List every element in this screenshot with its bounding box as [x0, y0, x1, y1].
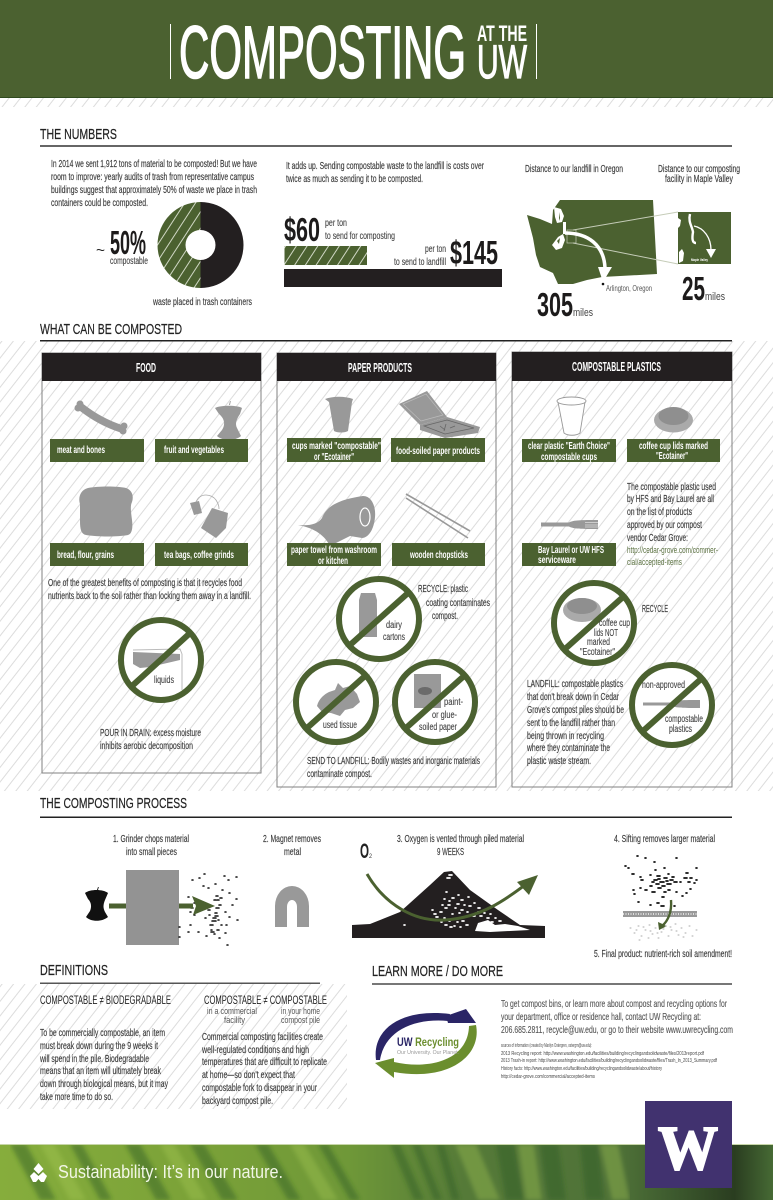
label: fruit and vegetables	[155, 439, 248, 462]
label: fruit and vegetables: fruit and vegetables	[164, 445, 224, 456]
text: landfill plastics: being thrown in recycling	[527, 731, 604, 742]
icon: pizza box	[399, 391, 480, 438]
definition: commercial vs home composting	[201, 993, 327, 1107]
stat: 50 percent compostable: compostable	[110, 256, 148, 267]
intro text: 2014 tons: In 2014 we sent 1,912 tons of material to be composted! But we have	[51, 159, 257, 170]
no sign: coffee cup lids not marked: marked	[587, 637, 610, 648]
section: definitions	[0, 963, 347, 1109]
definition: commercial vs home composting: facility	[224, 1015, 245, 1026]
label: food-soiled paper products	[391, 438, 485, 462]
no sign: coffee cup lids not marked	[554, 583, 634, 663]
label: paper towel: or kitchen	[318, 556, 348, 567]
icon: magnet	[275, 886, 309, 927]
UW logo: W	[658, 1115, 718, 1183]
no sign: coffee cup lids not marked: coffee cup	[599, 618, 630, 629]
intro text: cost: twice as much as sending it to be composted.	[286, 174, 423, 185]
text: sources: History facts: http://www.washington.edu/facilities/building/recyclingandsolidwaste/about/history	[501, 1066, 662, 1072]
text: sources: http://cedar-grove.com/commercial/accepted-items	[501, 1074, 595, 1080]
title	[179, 11, 527, 94]
UW logo	[645, 1101, 732, 1188]
text: approved plastics: cial/accepted-items	[627, 557, 682, 567]
step 2 caption	[263, 834, 321, 858]
label: meat and bones	[50, 439, 144, 462]
intro text: cost	[286, 161, 484, 185]
text: pour in drain	[100, 728, 201, 752]
label: cups marked compostable	[287, 438, 381, 463]
logo: UW Recycling	[375, 1009, 477, 1078]
stat: 50 percent compostable	[96, 224, 148, 267]
text: recycle plastic coating: compost.	[432, 611, 458, 622]
icon: fork	[541, 520, 598, 529]
text: approved plastics: approved by our compost	[627, 520, 702, 531]
no sign: used tissue: used tissue	[323, 720, 357, 731]
label: coffee cup lids: "Ecotainer"	[656, 451, 688, 462]
panel heading: compostable plastics: COMPOSTABLE PLASTICS	[572, 360, 661, 374]
particles: fine soil	[630, 924, 697, 940]
text: sources: 2013 Recycling report: http://www.washington.edu/facilities/building/recyclingandsolidwaste/files/2013report.pdf	[501, 1051, 704, 1057]
no sign: non-approved plastics	[632, 665, 712, 745]
bar chart: cost per ton	[284, 211, 502, 287]
no sign: liquids	[121, 620, 201, 700]
text: recycle plastic coating: RECYCLE: plastic	[418, 584, 468, 595]
definition: commercial vs home composting: backyard compost pile.	[202, 1096, 273, 1107]
map: Maple Valley detail: Maple Valley	[691, 257, 709, 262]
stat: 305 miles: miles	[573, 307, 593, 319]
intro text: 2014 tons: room to improve: yearly audits of trash from representative campus	[51, 172, 254, 183]
definition: compostable vs biodegradable: down through biological means, but it may	[40, 1079, 169, 1090]
step 1 caption: into small pieces	[126, 847, 177, 858]
footer band	[0, 1144, 773, 1200]
text: approved plastics: by HFS and Bay Laurel are all	[627, 494, 714, 505]
heading: the numbers: THE NUMBERS	[40, 127, 117, 143]
text: food benefits: One of the greatest benefits of composting is that it recycles food	[48, 578, 242, 589]
icon: coffee lid	[654, 407, 693, 432]
panel: compostable plastics	[512, 352, 732, 787]
map label: Arlington: Arlington, Oregon	[606, 283, 652, 293]
map captions	[525, 164, 740, 185]
definition: compostable vs biodegradable: To be commercially compostable, an item	[40, 1028, 165, 1039]
label: serviceware	[522, 543, 616, 566]
bar chart: cost per ton: per ton	[325, 218, 347, 229]
stat: 25 miles: 25	[682, 270, 705, 307]
text: send to landfill: SEND TO LANDFILL: Bodily wastes and inorganic materials	[307, 756, 480, 767]
definition: compostable vs biodegradable: take more time to do so.	[40, 1092, 113, 1103]
label: coffee cup lids: coffee cup lids marked	[639, 441, 708, 452]
definition: compostable vs biodegradable: COMPOSTABLE ≠ BIODEGRADABLE	[40, 993, 171, 1007]
definition: commercial vs home composting: temperatures that are difficult to replicate	[202, 1057, 327, 1068]
definition: commercial vs home composting: compost pile	[281, 1015, 320, 1026]
no sign: liquids: liquids	[154, 675, 174, 686]
no sign: used tissue	[296, 662, 376, 742]
definition: commercial vs home composting: in your home	[281, 1006, 320, 1017]
text: landfill plastics: sent to the landfill rather than	[527, 718, 615, 729]
heading: learn more: LEARN MORE / DO MORE	[372, 964, 503, 980]
panel: paper products	[277, 353, 496, 787]
text: recycle plastic coating	[418, 584, 490, 622]
step 2 caption: 2. Magnet removes	[263, 834, 321, 845]
definition: commercial vs home composting: COMPOSTABLE ≠ COMPOSTABLE	[204, 993, 327, 1007]
heading: what can be composted: WHAT CAN BE COMPOSTED	[40, 322, 182, 338]
no sign: coffee cup lids not marked: "Ecotainer"	[580, 647, 615, 658]
step 1 caption: 1. Grinder chops material	[113, 834, 189, 845]
text: pour in drain: POUR IN DRAIN: excess moisture	[100, 728, 201, 739]
label: food-soiled paper products: food-soiled paper products	[396, 446, 480, 457]
donut chart: 50% compostable	[158, 202, 244, 288]
text: landfill plastics: plastic waste stream.	[527, 756, 591, 767]
logo: UW Recycling: UW Recycling	[397, 1035, 459, 1049]
icon: chopsticks	[406, 494, 470, 538]
specks: white compost	[404, 875, 501, 927]
definition: commercial vs home composting: at home—so don't expect that	[202, 1070, 295, 1081]
definition: commercial vs home composting: well-regulated conditions and high	[201, 1045, 309, 1056]
icon: apple core	[215, 401, 242, 440]
no sign: paint or glue soiled paper: paint-	[444, 697, 463, 708]
stat: 50 percent compostable: 50%	[110, 224, 146, 261]
icon: bread	[79, 486, 133, 536]
particles: ground material	[179, 874, 238, 945]
label: tea bags, coffee grinds: tea bags, coffee grinds	[164, 550, 234, 561]
label: wooden chopsticks: wooden chopsticks	[409, 550, 468, 561]
text: landfill plastics: that don't break down in Cedar	[527, 692, 619, 703]
stat: 25 miles: miles	[705, 291, 725, 303]
text: send to landfill	[307, 756, 480, 780]
no sign: non-approved plastics: non-approved	[642, 680, 685, 691]
label: clear plastic cups: compostable cups	[541, 452, 597, 463]
label: coffee cup lids	[627, 439, 720, 462]
label: cups marked compostable: or "Ecotainer"	[314, 452, 354, 463]
label: tea bags, coffee grinds	[155, 543, 248, 566]
title: COMPOSTING	[179, 11, 466, 94]
step 3 caption: 3. Oxygen is vented through piled material	[397, 834, 524, 845]
label: paper towel: paper towel from washroom	[291, 545, 377, 556]
bar chart: cost per ton: $145	[450, 234, 498, 271]
definition: compostable vs biodegradable: will spend in the pile. Biodegradable	[39, 1054, 149, 1065]
definition: commercial vs home composting: Commercial composting facilities create	[202, 1032, 323, 1043]
text: sources: sources of information (created by Marilyn Ostergren, ostergrn@uw.edu):	[501, 1043, 592, 1049]
no sign: dairy cartons: cartons	[383, 632, 405, 643]
map: Maple Valley detail	[678, 212, 731, 264]
text: landfill plastics: where they contaminate the	[526, 743, 610, 754]
header band	[0, 0, 773, 107]
text: sources	[501, 1043, 717, 1080]
step 1 caption	[113, 834, 189, 858]
panel heading: paper products: PAPER PRODUCTS	[348, 361, 412, 375]
icon: paper cup	[325, 397, 353, 432]
label: paper towel	[287, 543, 381, 567]
definition: compostable vs biodegradable: must break down during the 9 weeks it	[40, 1041, 158, 1052]
panel: food	[42, 353, 261, 773]
bar chart: cost per ton: $60	[284, 211, 320, 248]
heading: definitions: DEFINITIONS	[40, 963, 108, 979]
map: Washington state	[527, 200, 678, 285]
title: AT THE	[477, 21, 527, 46]
donut caption: waste placed in trash containers	[152, 297, 252, 308]
map captions: facility in Maple Valley	[665, 174, 734, 185]
intro text: 2014 tons: containers could be composted.	[51, 198, 148, 209]
label: serviceware: Bay Laurel or UW HFS	[538, 545, 604, 556]
label: clear plastic cups	[522, 439, 616, 463]
bar chart: cost per ton: per ton	[425, 244, 446, 255]
text: approved plastics: on the list of products	[627, 507, 692, 518]
text: food benefits: nutrients back to the soil rather than locking them away in a landfill.	[48, 591, 251, 602]
icon: paper towel roll	[298, 496, 375, 546]
intro text: cost: It adds up. Sending compostable waste to the landfill is costs over	[286, 161, 484, 172]
text: landfill plastics	[526, 679, 624, 767]
step 4 caption: 4. Sifting removes larger material	[614, 834, 715, 845]
text: contact information	[501, 999, 733, 1036]
text: food benefits	[48, 578, 251, 602]
no sign: non-approved plastics: plastics	[669, 724, 692, 735]
text: recycle: RECYCLE	[642, 604, 668, 615]
step 4 diagram: sieve	[623, 856, 697, 940]
icon: tea bags	[190, 495, 228, 538]
label: wooden chopsticks	[392, 543, 485, 566]
text: approved plastics: http://cedar-grove.com/commer-	[627, 545, 718, 555]
definition: commercial vs home composting: compostable fork to disappear in your	[202, 1083, 317, 1094]
text: approved plastics: vendor Cedar Grove:	[627, 533, 688, 544]
step 3 caption	[360, 834, 524, 863]
no sign: dairy cartons	[339, 579, 419, 659]
text: landfill plastics: Grove's compost piles should be	[527, 705, 624, 716]
definition: compostable vs biodegradable	[39, 993, 171, 1103]
title: UW	[477, 35, 527, 88]
no sign: paint or glue soiled paper: or glue-	[432, 710, 457, 721]
step 3 caption: 2	[369, 854, 373, 860]
no sign: coffee cup lids not marked: lids NOT	[594, 628, 618, 639]
step 3 caption: 9 WEEKS	[437, 847, 464, 858]
text: sources: 2013 Trash-in report: http://www.washington.edu/facilities/building/recyclingandsolidwaste/files/Trash_In_2013_Summary.pdf	[501, 1058, 717, 1064]
label: meat and bones: meat and bones	[57, 445, 105, 456]
label: clear plastic cups: clear plastic "Earth Choice"	[528, 441, 610, 452]
text: approved plastics	[627, 482, 718, 567]
footer slogan: Sustainability: It’s in our nature.	[58, 1162, 283, 1182]
section: learn more	[372, 964, 733, 1080]
intro text: 2014 tons: buildings suggest that approximately 50% of waste we place in trash	[51, 185, 257, 196]
no sign: paint or glue soiled paper: soiled paper	[419, 722, 458, 733]
bar chart: cost per ton: to send for composting	[325, 231, 395, 242]
step 3 diagram: compost pile	[352, 871, 545, 938]
step 1 diagram: grinder	[85, 870, 238, 945]
no sign: non-approved plastics: compostable	[665, 714, 703, 725]
panel heading: food: FOOD	[136, 361, 156, 375]
label: bread, flour, grains: bread, flour, grains	[57, 550, 114, 561]
text: landfill plastics: LANDFILL: compostable plastics	[527, 679, 623, 690]
stat: 50 percent compostable: ~	[96, 242, 105, 259]
text: pour in drain: inhibits aerobic decomposition	[100, 741, 193, 752]
heading: the composting process: THE COMPOSTING PROCESS	[40, 796, 187, 812]
logo: UW Recycling: Our University. Our Planet.	[397, 1050, 459, 1056]
no sign: dairy cartons: dairy	[386, 620, 402, 631]
step 2 caption: metal	[284, 847, 301, 858]
bar chart: cost per ton: to send to landfill	[394, 257, 446, 268]
label: cups marked compostable: cups marked "compostable"	[292, 441, 381, 452]
definition: compostable vs biodegradable: means that an item will ultimately break	[40, 1066, 162, 1077]
text: approved plastics: The compostable plastic used	[627, 482, 716, 493]
intro text: 2014 tons	[51, 159, 257, 209]
label: bread, flour, grains	[50, 543, 144, 566]
icon: clear cup	[557, 397, 586, 435]
step 3 caption: O	[360, 840, 369, 863]
stat: 305 miles: 305	[537, 286, 573, 323]
definition: commercial vs home composting: in a commercial	[207, 1006, 257, 1017]
map captions: Distance to our landfill in Oregon	[525, 164, 623, 175]
label: serviceware: serviceware	[538, 555, 576, 566]
icon: sustainability	[30, 1163, 47, 1182]
text: recycle plastic coating: coating contaminates	[426, 598, 490, 609]
text: send to landfill: contaminate compost.	[307, 769, 372, 780]
icon: bone	[74, 400, 128, 434]
no sign: paint or glue soiled paper	[395, 662, 475, 742]
